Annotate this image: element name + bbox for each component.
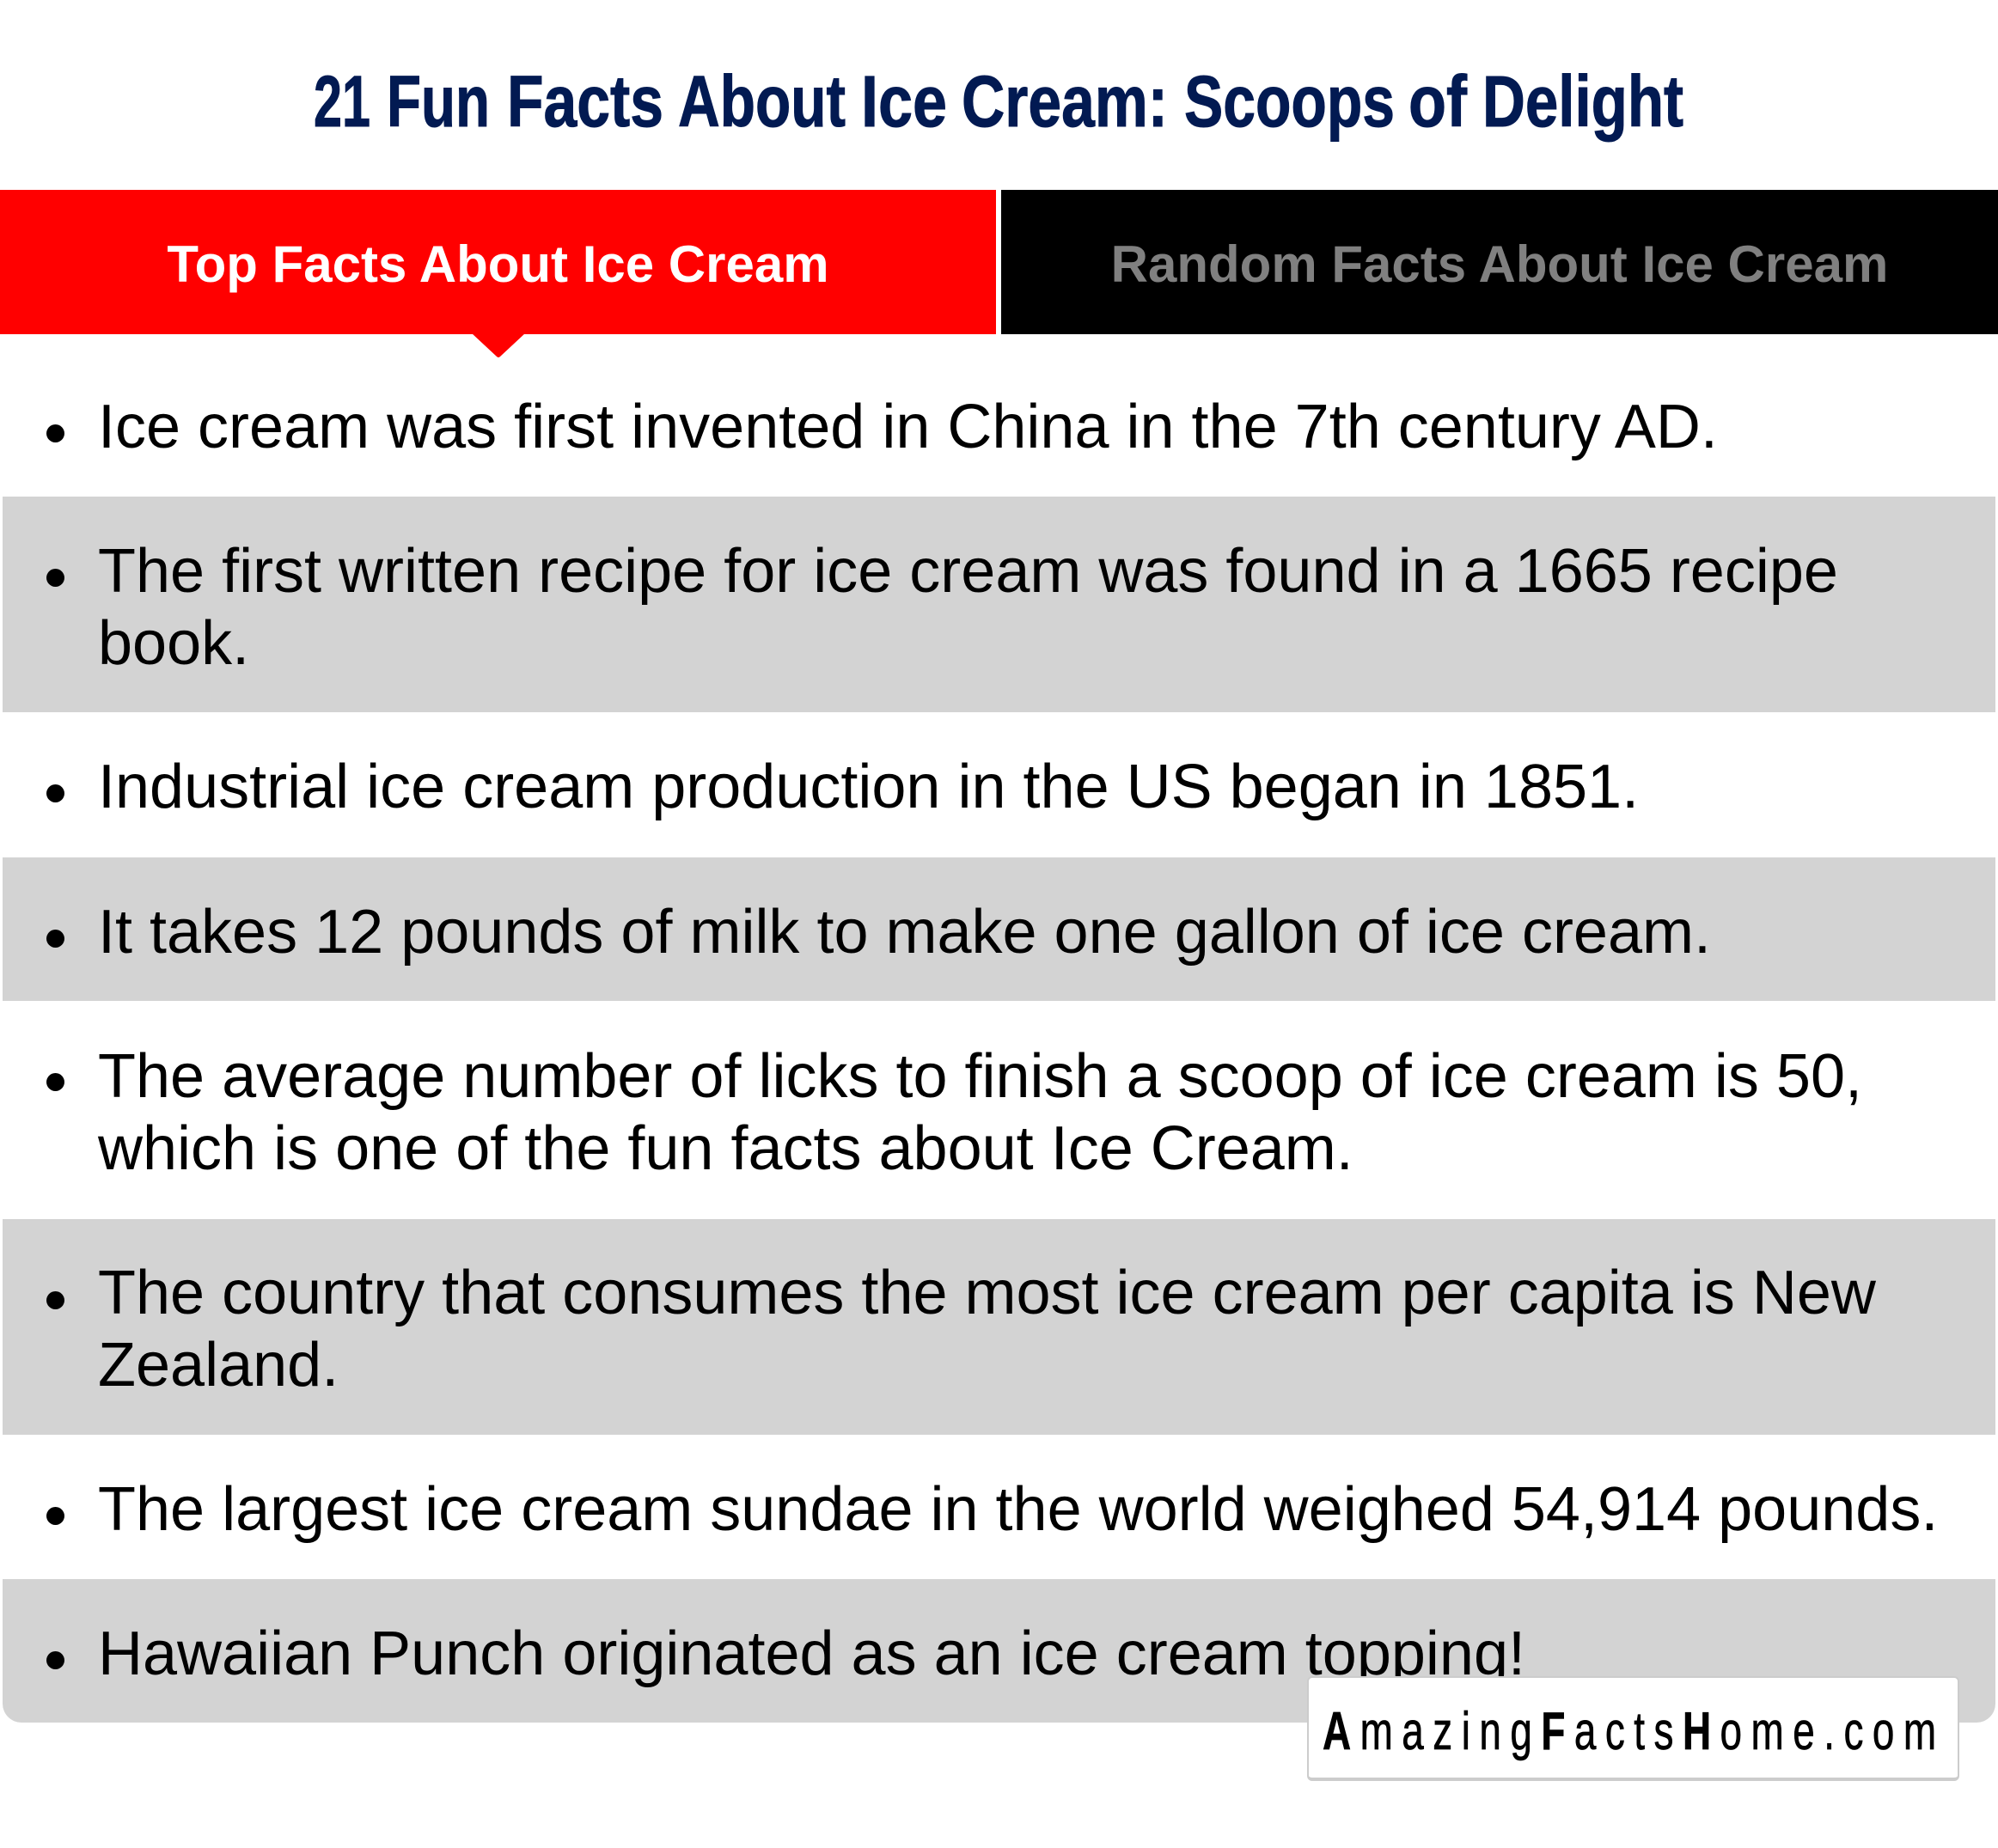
fact 8 xyxy=(3,1579,1995,1723)
title: Facts xyxy=(507,61,663,142)
title xyxy=(314,61,1683,143)
watermark badge xyxy=(1307,1676,1959,1781)
tab: random facts (inactive) xyxy=(1001,190,1998,334)
fact 7: The largest ice cream sundae in the world weighed 54,914 pounds. xyxy=(98,1475,1938,1544)
tab: top facts (active): Top Facts About Ice Cream xyxy=(167,235,829,293)
title: Cream: xyxy=(962,61,1168,142)
fact 5: which is one of the fun facts about Ice Cream. xyxy=(98,1114,1353,1183)
title: Fun xyxy=(387,61,490,142)
fact 6 xyxy=(3,1219,1995,1435)
fact 4 xyxy=(3,857,1995,1001)
tab: top facts (active) xyxy=(0,190,996,334)
title: About xyxy=(678,61,846,142)
fact 8: Hawaiian Punch originated as an ice cream topping! xyxy=(98,1619,1525,1688)
icon: active tab pointer xyxy=(473,334,524,357)
title: of xyxy=(1408,61,1468,142)
fact 5: The average number of licks to finish a scoop of ice cream is 50, xyxy=(98,1042,1862,1111)
fact 2: The first written recipe for ice cream was found in a 1665 recipe xyxy=(98,537,1838,606)
title: Delight xyxy=(1482,61,1683,142)
fact 6: The country that consumes the most ice cream per capita is New xyxy=(98,1259,1876,1327)
watermark text: AmazingFactsHome.com xyxy=(1323,1701,1936,1761)
fact 2: book. xyxy=(98,609,249,678)
fact 5 xyxy=(3,1001,1995,1219)
title: Ice xyxy=(861,61,947,142)
fact 4: It takes 12 pounds of milk to make one gallon of ice cream. xyxy=(98,898,1711,967)
fact 6: Zealand. xyxy=(98,1331,339,1400)
tab: random facts (inactive): Random Facts About Ice Cream xyxy=(1111,235,1888,293)
fact 1: Ice cream was first invented in China in the 7th century AD. xyxy=(98,393,1718,461)
fact 3: Industrial ice cream production in the US began in 1851. xyxy=(98,753,1639,821)
title: Scoops xyxy=(1184,61,1395,142)
title: 21 xyxy=(314,61,370,142)
fact 2 xyxy=(3,497,1995,712)
